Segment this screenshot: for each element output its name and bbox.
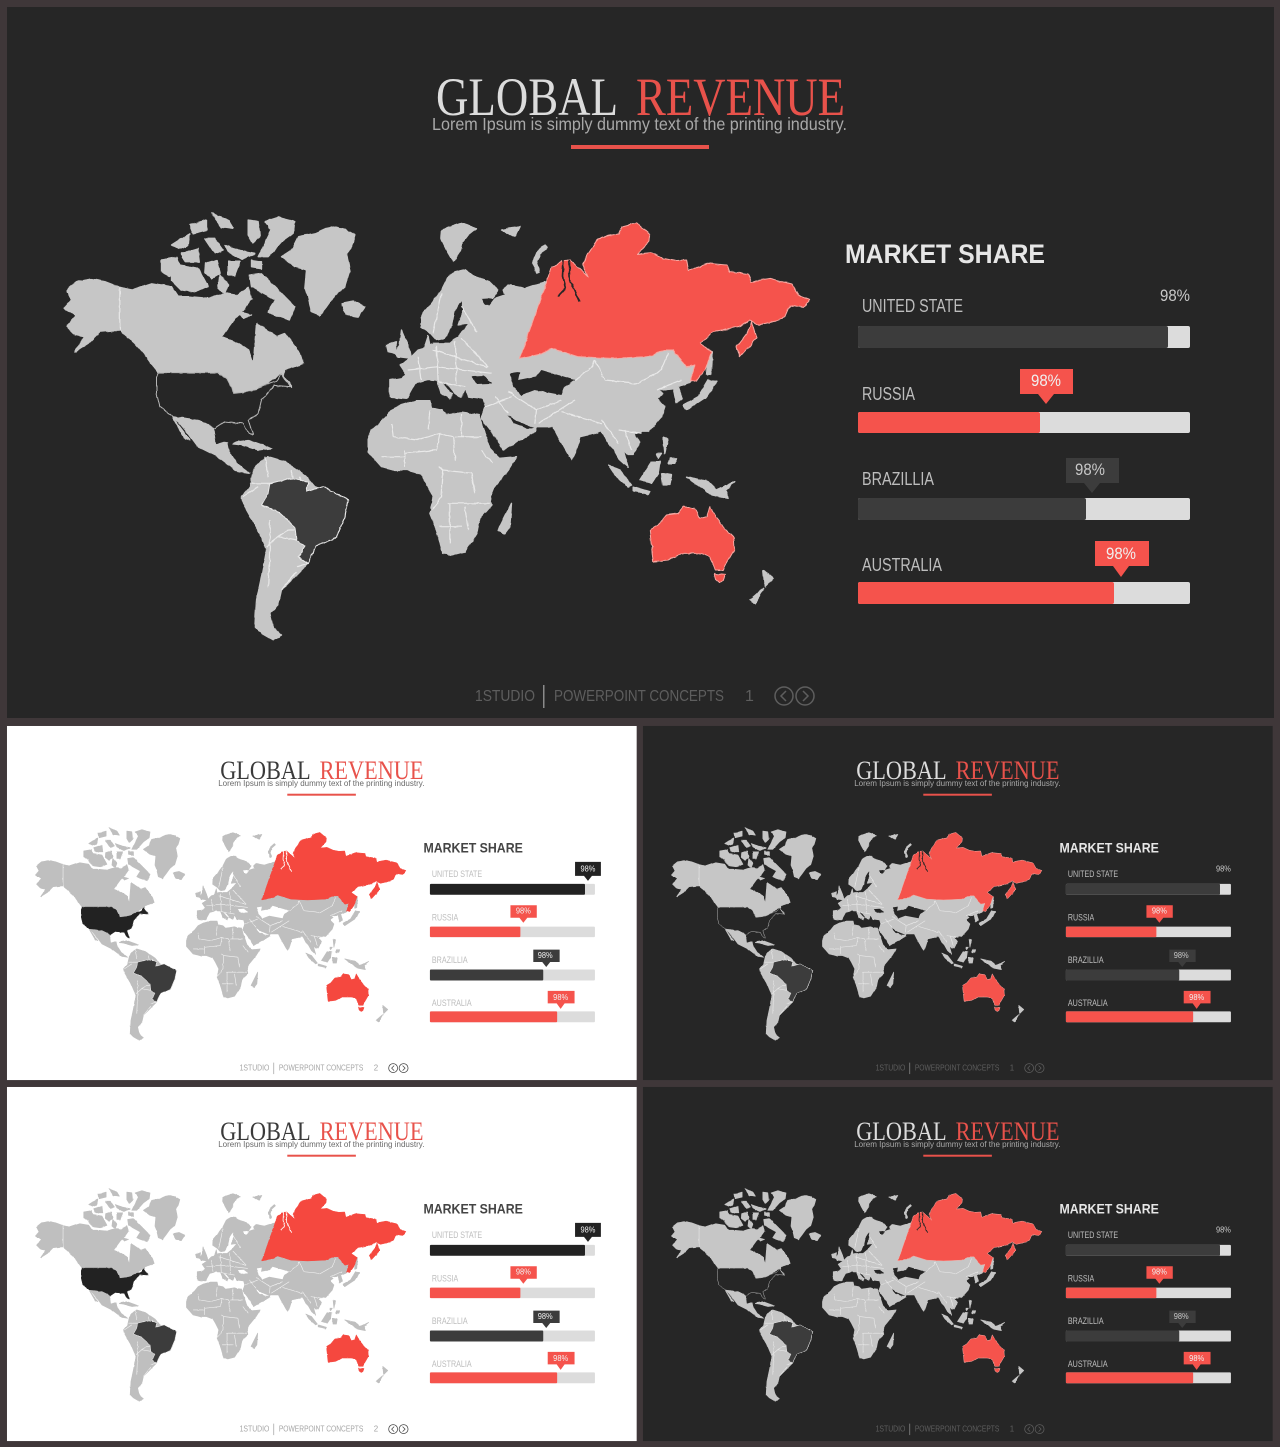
- footer navigation: [475, 685, 814, 708]
- footer navigation: 1: [1010, 1425, 1015, 1434]
- bar: united state: [430, 862, 601, 895]
- market share heading: MARKET SHARE: [423, 840, 523, 855]
- footer navigation: POWERPOINT CONCEPTS: [915, 1064, 999, 1073]
- title: GLOBAL: [436, 67, 618, 127]
- bar: united state: UNITED STATE: [432, 869, 482, 879]
- panel: main dark slide: [7, 7, 1274, 718]
- bar: russia: 98%: [516, 906, 531, 916]
- bar: brazillia: 98%: [1075, 460, 1105, 479]
- footer navigation: [240, 1424, 408, 1435]
- bar: russia: [430, 905, 595, 937]
- bar: brazillia: 98%: [1174, 1311, 1189, 1321]
- footer navigation: 1: [1010, 1064, 1015, 1073]
- bar: russia: RUSSIA: [862, 384, 915, 404]
- bar: russia: [1066, 905, 1231, 937]
- bar: united state: UNITED STATE: [1068, 1230, 1118, 1240]
- subtitle: Lorem Ipsum is simply dummy text of the printing industry.: [218, 778, 424, 788]
- footer navigation: 1STUDIO: [475, 688, 535, 705]
- bar: brazillia: BRAZILLIA: [432, 955, 468, 965]
- title underline: [571, 145, 709, 149]
- bar: russia: 98%: [516, 1267, 531, 1277]
- title: GLOBAL: [856, 755, 947, 785]
- title: REVENUE: [956, 1116, 1059, 1146]
- title: [220, 755, 423, 785]
- bar: russia: RUSSIA: [432, 913, 458, 923]
- world map: [672, 828, 1042, 1041]
- title underline: [287, 794, 356, 796]
- title: [220, 1116, 423, 1146]
- bar: russia: RUSSIA: [1068, 913, 1094, 923]
- footer navigation: POWERPOINT CONCEPTS: [279, 1064, 363, 1073]
- bar: australia: AUSTRALIA: [1068, 1359, 1108, 1369]
- bar: russia: [430, 1266, 595, 1298]
- footer navigation: 2: [374, 1425, 379, 1434]
- title: REVENUE: [636, 67, 845, 127]
- bar: united state: UNITED STATE: [432, 1230, 482, 1240]
- footer navigation: [240, 1063, 408, 1074]
- bar: united state: [1066, 863, 1231, 895]
- panel: white slide top left: [7, 726, 637, 1080]
- bar: brazillia: [1066, 950, 1231, 980]
- title: GLOBAL: [220, 1116, 311, 1146]
- bar: brazillia: 98%: [538, 1311, 553, 1321]
- footer navigation: [876, 1424, 1044, 1435]
- bar: united state: 98%: [581, 863, 596, 873]
- bar: brazillia: BRAZILLIA: [1068, 1316, 1104, 1326]
- bar: australia: AUSTRALIA: [1068, 998, 1108, 1008]
- title: GLOBAL: [856, 1116, 947, 1146]
- panel: dark slide top right: [643, 726, 1273, 1080]
- bar: russia: [1066, 1266, 1231, 1298]
- bar: brazillia: BRAZILLIA: [862, 469, 934, 489]
- title: REVENUE: [320, 1116, 423, 1146]
- bar: australia: AUSTRALIA: [432, 1359, 472, 1369]
- footer navigation: 1STUDIO: [240, 1064, 269, 1073]
- footer navigation: 1: [745, 688, 754, 705]
- bar: brazillia: [430, 950, 595, 980]
- bar: australia: [430, 1352, 595, 1383]
- bar: australia: AUSTRALIA: [432, 998, 472, 1008]
- world map: [36, 1189, 406, 1402]
- subtitle: Lorem Ipsum is simply dummy text of the printing industry.: [218, 1139, 424, 1149]
- world map: [672, 1189, 1042, 1402]
- footer navigation: 1STUDIO: [876, 1064, 905, 1073]
- bar: russia: 98%: [1152, 906, 1167, 916]
- subtitle: Lorem Ipsum is simply dummy text of the printing industry.: [854, 1139, 1060, 1149]
- bar: russia: 98%: [1031, 371, 1061, 390]
- bar: australia: 98%: [553, 1353, 569, 1363]
- title: REVENUE: [320, 755, 423, 785]
- bar: united state: 98%: [1216, 1224, 1231, 1234]
- footer navigation: POWERPOINT CONCEPTS: [279, 1425, 363, 1434]
- footer navigation: 1STUDIO: [240, 1425, 269, 1434]
- bar: australia: [1066, 991, 1231, 1022]
- title underline: [287, 1155, 356, 1157]
- footer navigation: 2: [374, 1064, 379, 1073]
- bar: united state: [858, 286, 1190, 348]
- bar: russia: RUSSIA: [432, 1274, 458, 1284]
- bar: united state: 98%: [1160, 286, 1190, 305]
- subtitle: Lorem Ipsum is simply dummy text of the printing industry.: [432, 114, 847, 134]
- world map: [65, 214, 811, 641]
- bar: united state: [430, 1223, 601, 1256]
- bar: russia: 98%: [1152, 1267, 1167, 1277]
- bar: united state: 98%: [581, 1224, 596, 1234]
- subtitle: Lorem Ipsum is simply dummy text of the printing industry.: [854, 778, 1060, 788]
- bar: united state: 98%: [1216, 863, 1231, 873]
- market share heading: MARKET SHARE: [423, 1201, 523, 1216]
- bar: australia: 98%: [1189, 992, 1205, 1002]
- panel: white slide bottom left: [7, 1087, 637, 1441]
- footer navigation: POWERPOINT CONCEPTS: [554, 688, 724, 705]
- title underline: [923, 1155, 992, 1157]
- bar: australia: AUSTRALIA: [862, 555, 942, 575]
- footer navigation: POWERPOINT CONCEPTS: [915, 1425, 999, 1434]
- bar: australia: 98%: [1106, 544, 1136, 563]
- bar: united state: UNITED STATE: [1068, 869, 1118, 879]
- title: REVENUE: [956, 755, 1059, 785]
- bar: brazillia: [1066, 1311, 1231, 1341]
- market share heading: MARKET SHARE: [1059, 840, 1159, 855]
- title: [436, 67, 845, 127]
- market share heading: MARKET SHARE: [845, 239, 1045, 269]
- bar: brazillia: 98%: [1174, 950, 1189, 960]
- title: [856, 1116, 1059, 1146]
- bar: australia: [858, 541, 1190, 604]
- panel: dark slide bottom right: [643, 1087, 1273, 1441]
- bar: russia: RUSSIA: [1068, 1274, 1094, 1284]
- title: [856, 755, 1059, 785]
- title underline: [923, 794, 992, 796]
- bar: united state: UNITED STATE: [862, 296, 963, 316]
- bar: brazillia: [430, 1311, 595, 1341]
- title: GLOBAL: [220, 755, 311, 785]
- bar: brazillia: [858, 458, 1190, 520]
- bar: australia: 98%: [1189, 1353, 1205, 1363]
- bar: brazillia: 98%: [538, 950, 553, 960]
- bar: australia: 98%: [553, 992, 569, 1002]
- market share heading: MARKET SHARE: [1059, 1201, 1159, 1216]
- footer navigation: [876, 1063, 1044, 1074]
- bar: australia: [430, 991, 595, 1022]
- bar: russia: [858, 369, 1190, 433]
- world map: [36, 828, 406, 1041]
- bar: australia: [1066, 1352, 1231, 1383]
- bar: brazillia: BRAZILLIA: [1068, 955, 1104, 965]
- bar: brazillia: BRAZILLIA: [432, 1316, 468, 1326]
- footer navigation: 1STUDIO: [876, 1425, 905, 1434]
- bar: united state: [1066, 1224, 1231, 1256]
